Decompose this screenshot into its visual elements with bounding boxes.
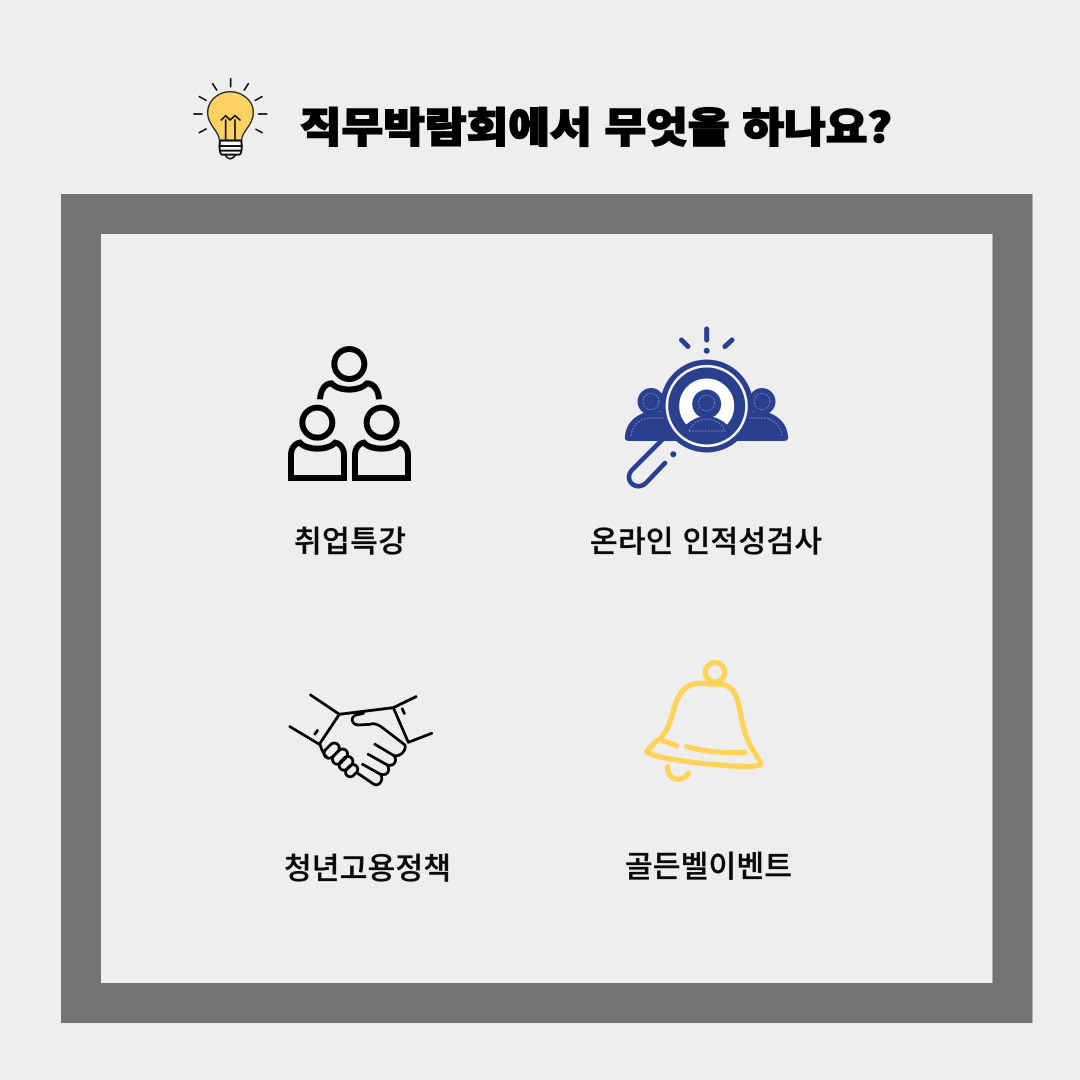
icon: magnifier over people xyxy=(625,329,788,486)
handle xyxy=(629,434,668,486)
alert rays xyxy=(682,329,732,346)
item: youth employment policy xyxy=(284,695,451,888)
item: career lecture xyxy=(291,349,408,561)
icon: bell xyxy=(647,663,761,779)
dashed highlights xyxy=(631,394,782,436)
label: golden bell event: 골든벨이벤트 xyxy=(625,842,792,886)
icon: handshake xyxy=(290,695,432,785)
item: online aptitude test xyxy=(590,329,822,561)
icon: light bulb xyxy=(194,79,267,159)
label: career lecture: 취업특강 xyxy=(294,517,406,561)
label: youth employment policy: 청년고용정책 xyxy=(284,844,451,888)
label: online aptitude test: 온라인 인적성검사 xyxy=(590,517,822,561)
item: golden bell event xyxy=(625,663,792,886)
title: 직무박람회에서 무엇을 하나요? xyxy=(300,95,892,154)
icon: group of people xyxy=(291,349,408,478)
center person xyxy=(686,390,727,434)
lens xyxy=(663,362,750,450)
panel: gray frame xyxy=(81,214,1012,1003)
side people xyxy=(625,388,788,441)
